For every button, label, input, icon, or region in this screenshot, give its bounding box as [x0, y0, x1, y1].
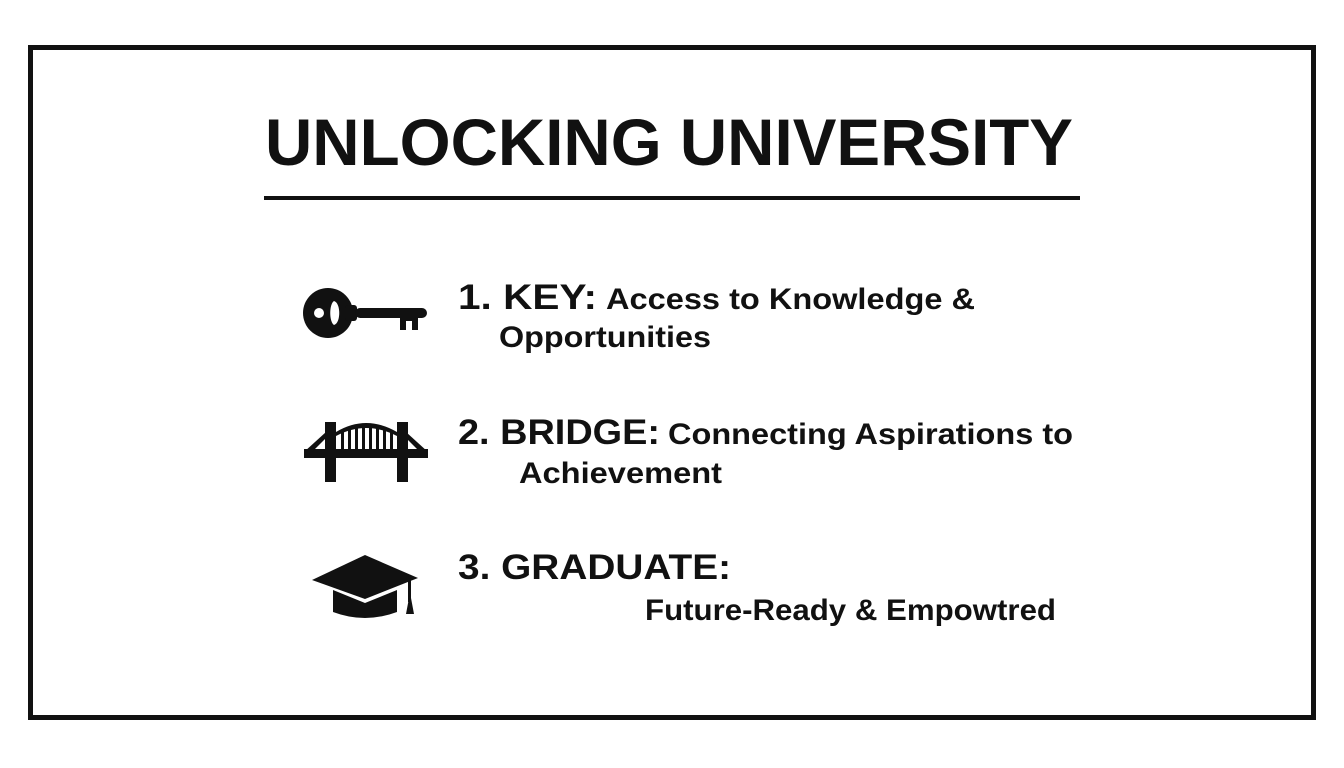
- item 2: bridge text: [458, 413, 1073, 490]
- item 3: graduate text: [458, 548, 1056, 627]
- item 1: key text: [458, 278, 975, 354]
- item 3: graduate text: 3. GRADUATE:: [458, 548, 731, 587]
- item 1: key text: Access to Knowledge &: [606, 283, 975, 316]
- item 1: key text: Opportunities: [499, 321, 711, 354]
- icon: graduation cap: [312, 555, 418, 618]
- item 1: key text: 1. KEY:: [458, 278, 597, 317]
- item 2: bridge text: 2. BRIDGE:: [458, 413, 660, 452]
- item 3: graduate text: Future-Ready & Empowtred: [645, 594, 1056, 627]
- item 2: bridge text: Achievement: [519, 457, 722, 490]
- title: UNLOCKING UNIVERSITY: [265, 105, 1073, 179]
- icon: key: [303, 288, 427, 338]
- item 2: bridge text: Connecting Aspirations to: [668, 418, 1073, 451]
- icon: bridge: [304, 422, 428, 482]
